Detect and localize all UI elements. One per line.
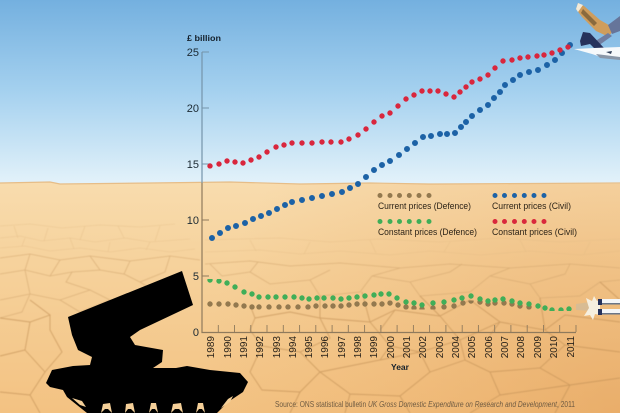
legend: constant prices (civil) xyxy=(492,222,577,237)
legend: constant prices (defence) xyxy=(378,222,477,237)
y axis labels xyxy=(187,47,199,339)
y axis labels: 5 xyxy=(193,271,199,283)
x axis year labels: 1996 xyxy=(320,336,331,358)
x axis year labels: 2010 xyxy=(549,336,560,358)
tank silhouette xyxy=(46,271,248,413)
x axis year labels: 1997 xyxy=(337,336,348,358)
legend: current prices (defence) xyxy=(378,196,471,211)
x axis year labels: 1995 xyxy=(304,336,315,358)
data series: constant prices (civil) xyxy=(210,47,568,166)
x axis year labels: 1994 xyxy=(288,336,299,358)
x axis year labels xyxy=(206,336,577,358)
x axis year labels: 1989 xyxy=(206,336,217,358)
y axis labels: 0 xyxy=(193,327,199,339)
x axis year labels: 1998 xyxy=(353,336,364,358)
x axis year labels: 1991 xyxy=(239,336,250,358)
desert background xyxy=(0,182,620,413)
data series: current prices (civil) xyxy=(212,45,570,238)
x axis year labels: 2000 xyxy=(386,336,397,358)
y axis labels: 20 xyxy=(187,103,199,115)
legend: constant prices (civil): Constant prices (Civil) xyxy=(492,227,577,237)
tank road wheel gaps xyxy=(72,396,233,413)
x axis year labels: 2006 xyxy=(484,336,495,358)
data series: current prices (defence) xyxy=(210,301,529,309)
x axis title: Year xyxy=(391,362,410,372)
y axis title: £ billion xyxy=(187,33,221,43)
y axis labels: 10 xyxy=(187,215,199,227)
missiles icon xyxy=(576,296,620,320)
sky background xyxy=(0,0,620,184)
aeroplane icon xyxy=(574,32,620,60)
y axis labels: 15 xyxy=(187,159,199,171)
x axis year labels: 2007 xyxy=(500,336,511,358)
x axis year labels: 2005 xyxy=(467,336,478,358)
x axis year labels: 2011 xyxy=(566,336,577,358)
legend: current prices (civil): Current prices (Civil) xyxy=(492,201,571,211)
legend xyxy=(378,196,577,237)
x axis year labels: 2001 xyxy=(402,336,413,358)
legend: constant prices (defence): Constant prices (Defence) xyxy=(378,227,477,237)
x axis year labels: 1993 xyxy=(272,336,283,358)
x axis year labels: 2008 xyxy=(516,336,527,358)
x axis year labels: 2004 xyxy=(451,336,462,358)
y axis labels: 25 xyxy=(187,47,199,59)
source note: Source: ONS statistical bulletin UK Gross Domestic Expenditure on Research and Development, 2011 xyxy=(275,400,575,409)
legend: current prices (defence): Current prices (Defence) xyxy=(378,201,471,211)
x axis year labels: 1999 xyxy=(369,336,380,358)
satellite icon xyxy=(576,3,620,46)
legend: current prices (civil) xyxy=(492,196,571,211)
data series: constant prices (defence) xyxy=(210,280,569,310)
x axis year labels: 2003 xyxy=(435,336,446,358)
x axis year labels: 1992 xyxy=(255,336,266,358)
x axis year labels: 1990 xyxy=(223,336,234,358)
chart axes xyxy=(202,52,576,332)
x axis year labels: 2009 xyxy=(533,336,544,358)
x axis year labels: 2002 xyxy=(418,336,429,358)
